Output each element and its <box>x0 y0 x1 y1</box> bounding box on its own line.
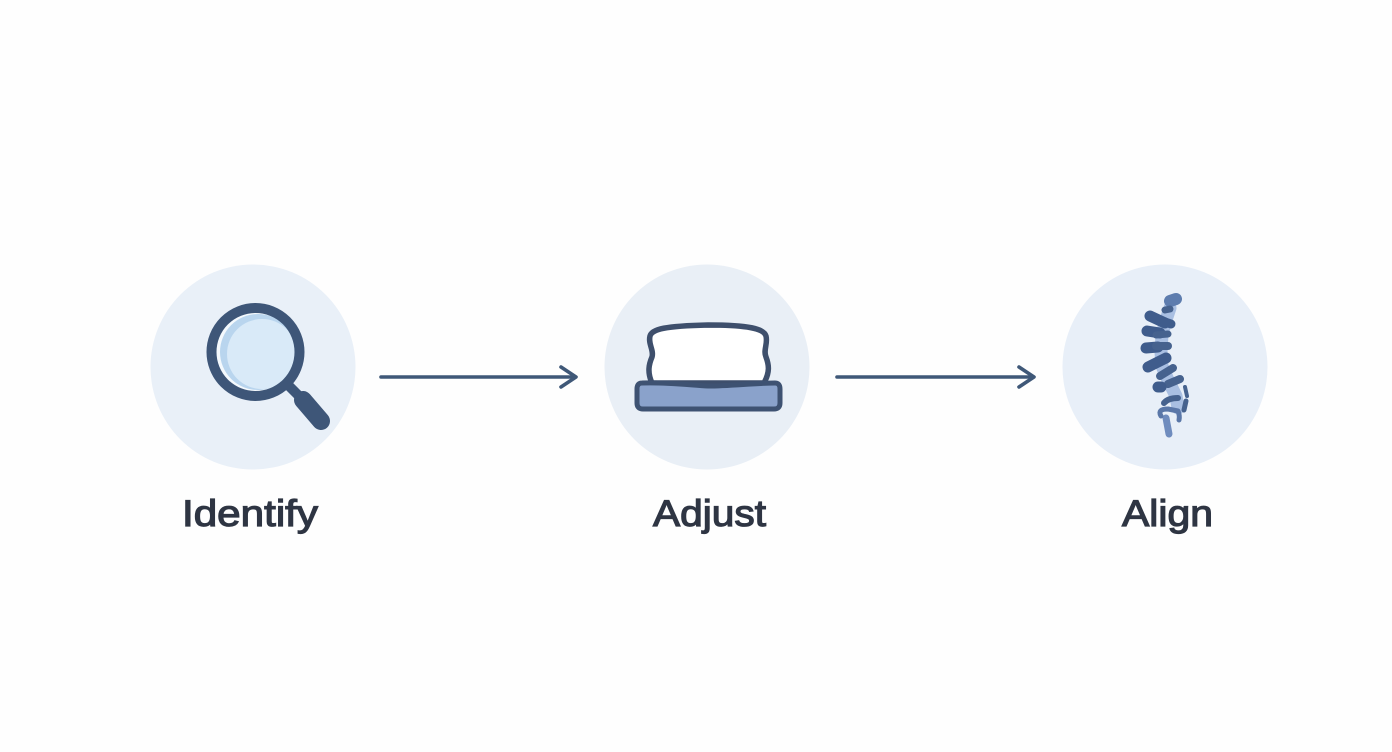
background circle: adjust <box>604 264 810 470</box>
label: identify: Identify <box>182 493 319 534</box>
label: align: Align <box>1122 493 1213 534</box>
arrow: identify to adjust <box>381 367 576 387</box>
mattress <box>637 383 780 409</box>
vertebrae <box>1170 299 1176 301</box>
label: adjust: Adjust <box>653 493 767 534</box>
icon: pillow on mattress <box>637 325 780 409</box>
background circle: align <box>1062 264 1268 470</box>
icon: magnifying glass <box>212 308 321 421</box>
pillow <box>649 325 768 383</box>
vertebral column <box>1161 308 1178 408</box>
step: adjust <box>604 264 810 534</box>
icon: spine <box>1146 299 1187 434</box>
arrow: adjust to align <box>837 367 1034 387</box>
step: identify <box>150 264 356 534</box>
background circle: identify <box>150 264 356 470</box>
step: align <box>1062 264 1268 534</box>
